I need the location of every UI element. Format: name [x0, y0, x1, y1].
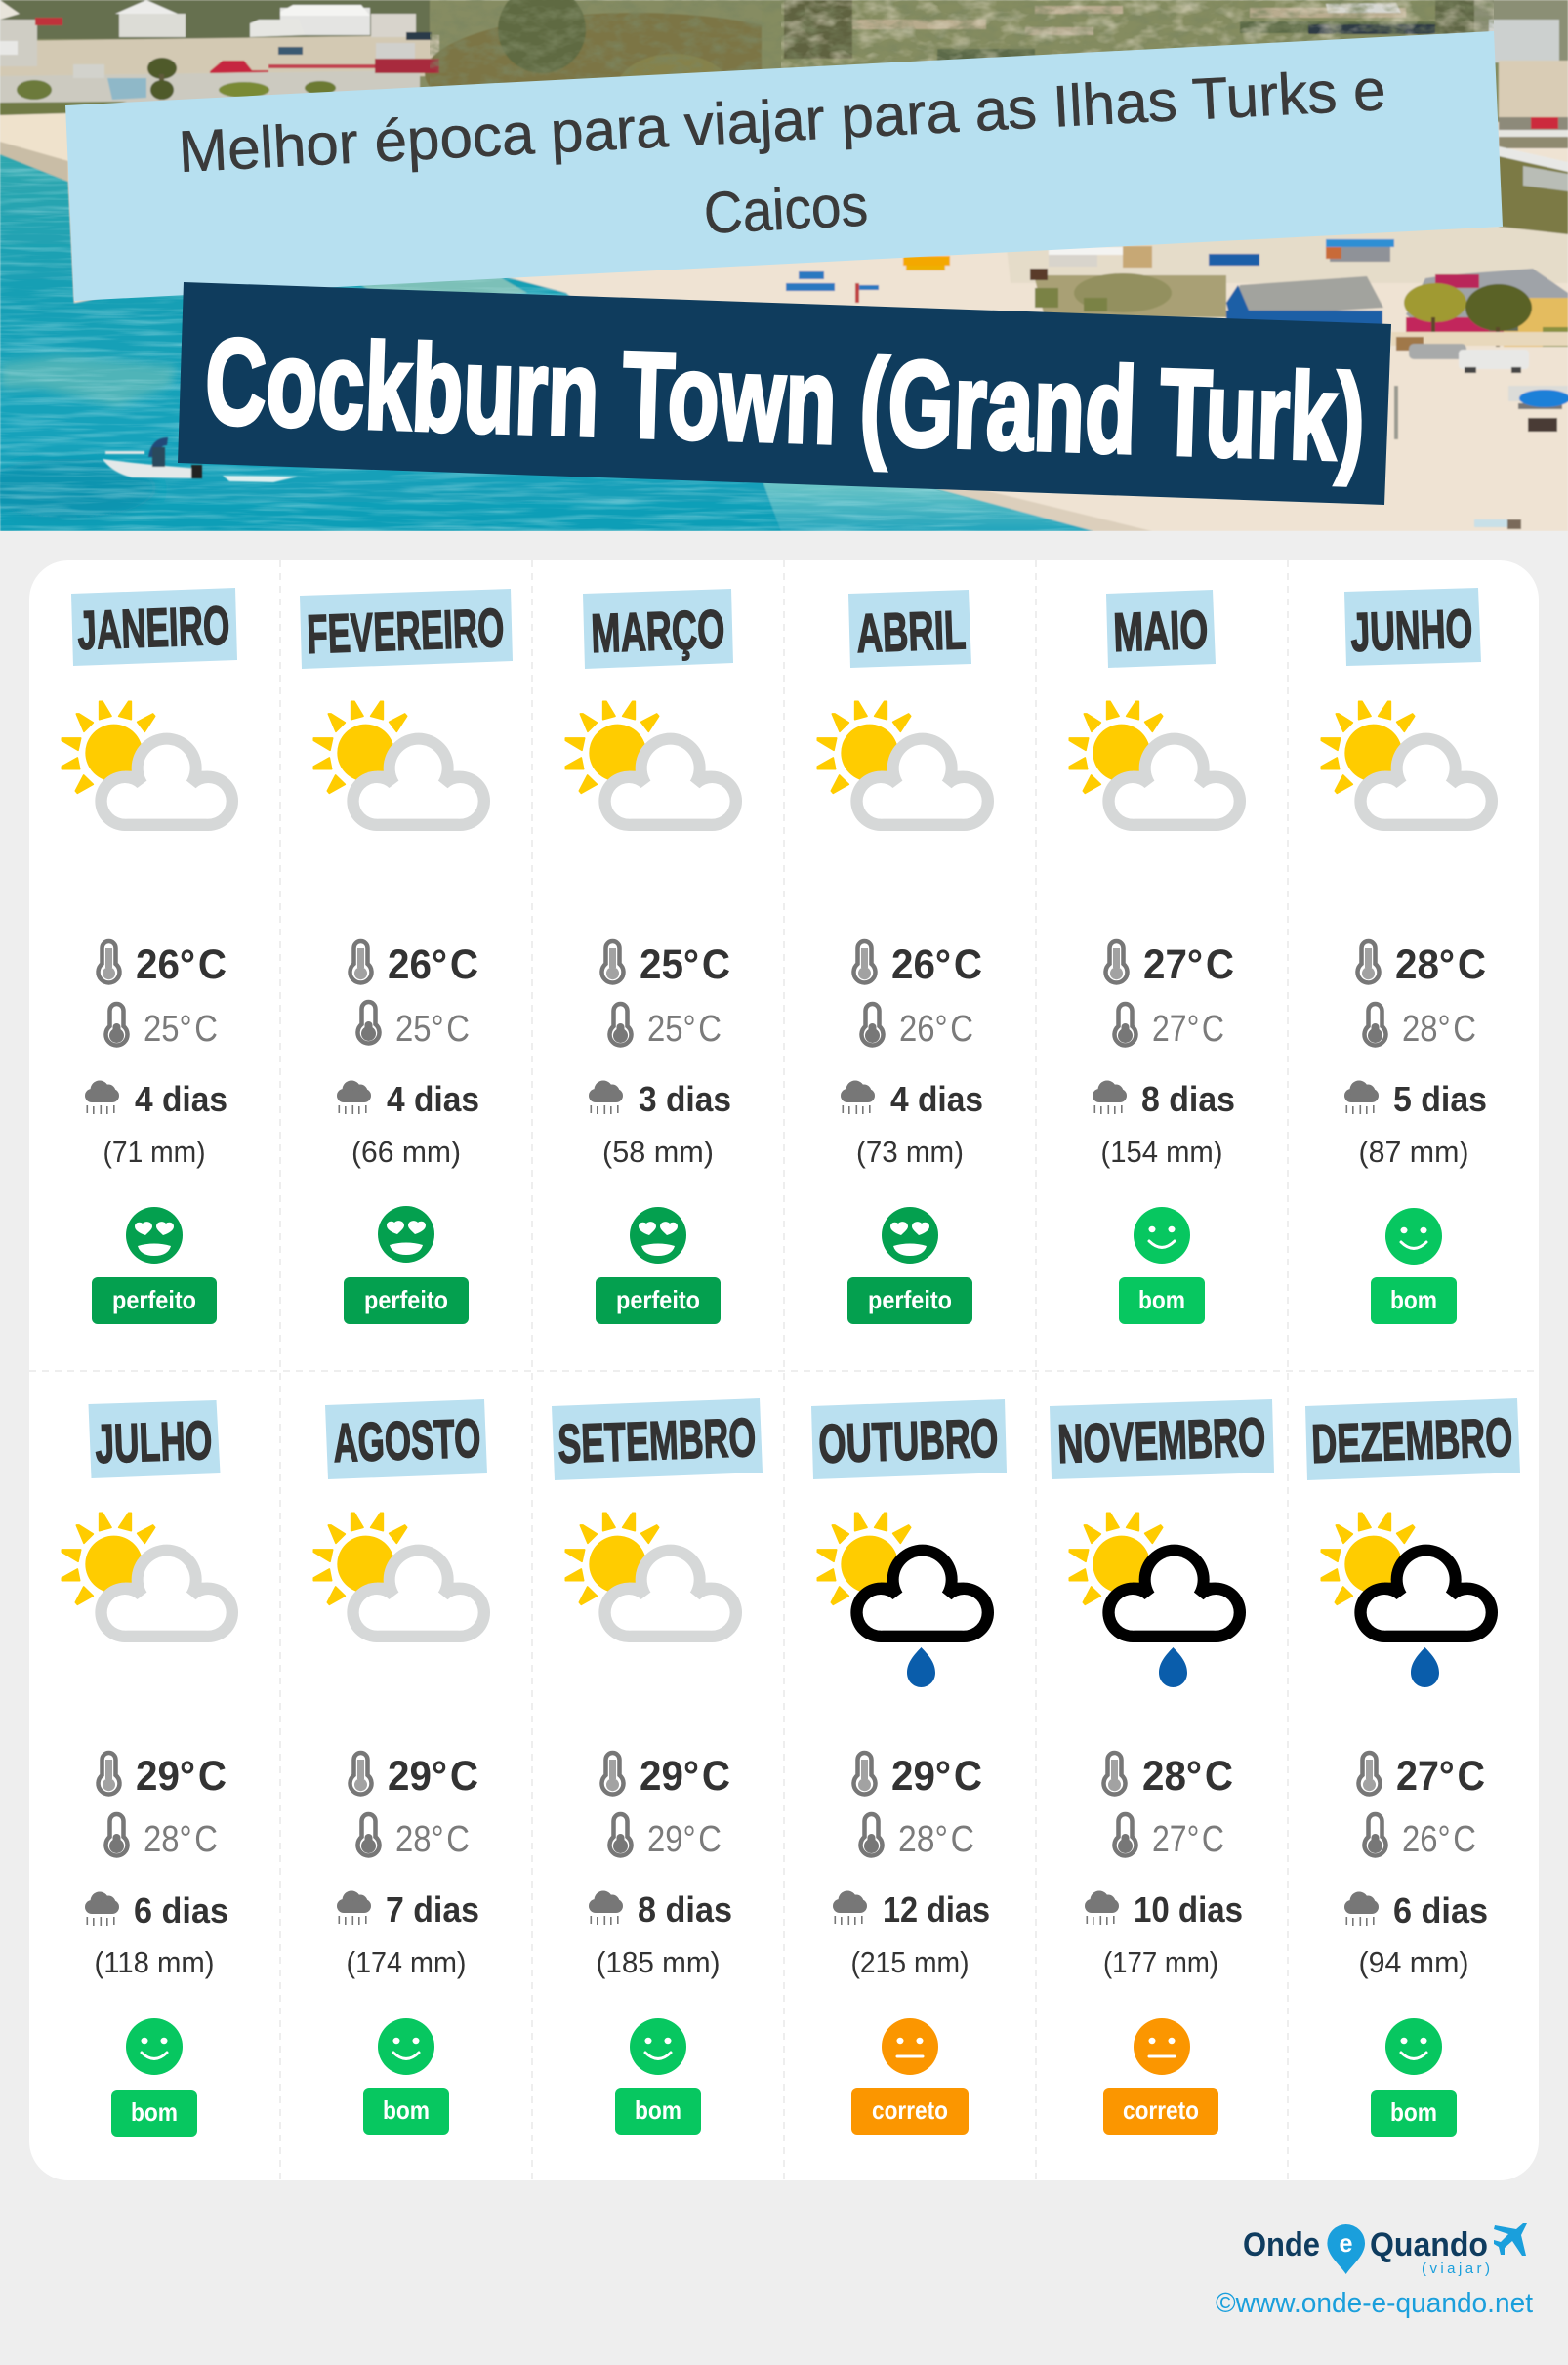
rating badge: perfeito — [112, 1285, 196, 1314]
max temperature — [1103, 1753, 1233, 1800]
rain days: 4 dias — [890, 1079, 983, 1119]
max temperature: 25°C — [640, 941, 730, 988]
rainfall: (174 mm) — [346, 1945, 467, 1979]
month: março — [565, 589, 742, 1324]
rainfall: (73 mm) — [856, 1135, 964, 1169]
max temperature — [853, 941, 982, 988]
weather icon — [62, 1513, 238, 1642]
rating badge — [847, 1277, 972, 1324]
min temperature: 27°C — [1152, 1819, 1224, 1860]
max temperature: 26°C — [388, 941, 478, 988]
min temperature — [609, 1004, 722, 1050]
rating badge — [1371, 1277, 1457, 1324]
rain days: 5 dias — [1393, 1079, 1487, 1119]
max temperature: 29°C — [136, 1753, 227, 1800]
website credit: ©www.onde-e-quando.net — [1216, 2288, 1533, 2319]
month: setembro — [552, 1398, 763, 2135]
rain days — [589, 1079, 731, 1119]
month label — [811, 1399, 1007, 1479]
rating badge: perfeito — [616, 1285, 700, 1314]
month: novembro — [1050, 1399, 1274, 2135]
rainfall: (94 mm) — [1359, 1945, 1468, 1979]
min temperature — [1115, 1004, 1224, 1050]
month label — [71, 588, 237, 666]
month label: JULHO — [94, 1409, 213, 1474]
month label — [583, 589, 733, 669]
rating face — [1134, 2018, 1190, 2075]
rainfall: (58 mm) — [602, 1135, 714, 1169]
rating badge — [1103, 2088, 1218, 2135]
month label: MAIO — [1112, 599, 1209, 663]
rain days — [833, 1889, 990, 1929]
month label — [1344, 588, 1481, 666]
month label — [848, 590, 971, 668]
logo: Onde e Quando (viajar): Onde — [1243, 2226, 1320, 2263]
rating face — [126, 1207, 183, 1264]
rainfall: (185 mm) — [596, 1945, 721, 1979]
max temperature — [99, 941, 227, 988]
rating badge: bom — [1390, 1285, 1437, 1314]
min temperature: 25°C — [144, 1009, 218, 1050]
top banner: subtitle: Melhor época para viajar para as Ilhas Turks e — [177, 57, 1387, 185]
weather icon — [565, 1513, 742, 1642]
rain days — [1344, 1890, 1488, 1930]
weather icon — [817, 1513, 994, 1687]
top banner: subtitle — [65, 31, 1503, 301]
hero photo: beach and sea — [0, 0, 1568, 531]
rain days — [337, 1079, 479, 1119]
rating badge: perfeito — [868, 1285, 952, 1314]
rain days — [1093, 1079, 1235, 1119]
rating face — [1385, 1208, 1442, 1265]
max temperature — [350, 941, 478, 988]
rainfall: (215 mm) — [851, 1945, 969, 1979]
rain days: 7 dias — [386, 1889, 479, 1929]
min temperature: 25°C — [395, 1009, 470, 1050]
month label — [552, 1398, 763, 1480]
rain days: 3 dias — [639, 1079, 731, 1119]
month: outubro — [811, 1399, 1007, 2135]
month label — [88, 1400, 221, 1478]
max temperature — [1359, 1753, 1485, 1800]
rain days — [589, 1889, 732, 1929]
icon: airplane — [1494, 2223, 1527, 2256]
rain days — [85, 1079, 227, 1119]
rating badge: bom — [1138, 1285, 1185, 1314]
max temperature: 26°C — [136, 941, 227, 988]
icon: map pin — [1327, 2224, 1365, 2274]
rain days — [337, 1889, 479, 1929]
rating badge — [92, 1277, 217, 1324]
max temperature: 27°C — [1396, 1753, 1485, 1800]
min temperature — [861, 1814, 974, 1860]
rain days: 8 dias — [638, 1889, 732, 1929]
max temperature — [601, 941, 730, 988]
month label — [1050, 1399, 1274, 1479]
rainfall: (118 mm) — [94, 1945, 215, 1979]
rain days: 4 dias — [387, 1079, 479, 1119]
month label — [1106, 590, 1216, 668]
rain days — [1344, 1079, 1487, 1119]
weather icon — [62, 701, 238, 831]
rating badge — [851, 2088, 969, 2135]
min temperature: 27°C — [1152, 1009, 1224, 1050]
rain days: 10 dias — [1134, 1889, 1243, 1929]
rainfall: (66 mm) — [351, 1135, 461, 1169]
month label: MARÇO — [590, 598, 725, 664]
min temperature: 28°C — [395, 1819, 470, 1860]
max temperature — [1105, 941, 1234, 988]
max temperature — [853, 1753, 982, 1800]
max temperature: 27°C — [1143, 941, 1234, 988]
month: dezembro — [1305, 1398, 1520, 2137]
min temperature — [105, 1004, 218, 1050]
rating face — [126, 2018, 183, 2075]
month: maio — [1069, 590, 1246, 1324]
weather icon — [565, 701, 742, 831]
month label: AGOSTO — [332, 1407, 481, 1473]
logo: Onde e Quando (viajar) — [1243, 2223, 1527, 2277]
rating badge — [344, 1277, 469, 1324]
rain days — [85, 1890, 228, 1930]
month label — [300, 589, 513, 669]
rainfall: (154 mm) — [1101, 1135, 1222, 1169]
rating badge: bom — [1390, 2097, 1437, 2127]
rating face — [378, 2018, 434, 2075]
min temperature — [357, 1002, 470, 1050]
month label: JANEIRO — [76, 595, 230, 661]
rating badge — [615, 2088, 701, 2135]
month label: ABRIL — [855, 599, 967, 664]
min temperature — [357, 1814, 470, 1860]
rating badge: bom — [635, 2095, 681, 2125]
rainfall: (87 mm) — [1359, 1135, 1468, 1169]
rating face — [378, 1206, 434, 1263]
rating badge — [1371, 2090, 1457, 2137]
rating badge — [1119, 1277, 1205, 1324]
weather icon — [1069, 701, 1246, 831]
min temperature: 28°C — [1402, 1009, 1476, 1050]
month label: SETEMBRO — [557, 1406, 757, 1474]
month label: JUNHO — [1349, 598, 1473, 663]
rating badge: correto — [872, 2095, 948, 2125]
weather icon — [817, 701, 994, 831]
rating badge — [111, 2090, 197, 2137]
rainfall: (177 mm) — [1103, 1945, 1218, 1979]
min temperature: 29°C — [647, 1819, 722, 1860]
max temperature: 26°C — [891, 941, 982, 988]
rain days: 8 dias — [1141, 1079, 1235, 1119]
rain days — [1085, 1889, 1243, 1929]
weather icon — [313, 1513, 490, 1642]
logo: Onde e Quando (viajar): (viajar) — [1422, 2261, 1490, 2277]
month: fevereiro — [300, 589, 513, 1324]
min temperature — [1365, 1814, 1476, 1860]
min temperature: 26°C — [899, 1009, 973, 1050]
min temperature — [1365, 1004, 1476, 1050]
max temperature: 29°C — [891, 1753, 982, 1800]
max temperature: 28°C — [1395, 941, 1486, 988]
rating badge: perfeito — [364, 1285, 448, 1314]
max temperature: 29°C — [388, 1753, 478, 1800]
rating badge — [363, 2088, 449, 2135]
rating badge: correto — [1123, 2095, 1199, 2125]
rain days — [841, 1079, 983, 1119]
min temperature — [861, 1004, 973, 1050]
rain days: 6 dias — [134, 1890, 228, 1930]
rainfall: (71 mm) — [103, 1135, 205, 1169]
month label: OUTUBRO — [817, 1407, 999, 1474]
weather icon — [1321, 1513, 1498, 1687]
panel: monthly climate table — [29, 560, 1539, 2180]
max temperature — [99, 1753, 227, 1800]
rating face — [1385, 2018, 1442, 2075]
month: agosto — [313, 1399, 490, 2135]
rating face — [882, 1207, 938, 1264]
month label: FEVEREIRO — [306, 597, 505, 665]
rating badge: bom — [383, 2095, 430, 2125]
min temperature — [1115, 1814, 1224, 1860]
rating badge: bom — [131, 2097, 178, 2127]
month: abril — [817, 590, 994, 1324]
max temperature: 28°C — [1142, 1753, 1233, 1800]
rating face — [630, 2018, 686, 2075]
min temperature: 28°C — [144, 1819, 218, 1860]
max temperature — [350, 1753, 478, 1800]
month: janeiro — [62, 588, 238, 1324]
min temperature: 26°C — [1402, 1819, 1476, 1860]
rain days: 12 dias — [883, 1889, 990, 1929]
min temperature — [105, 1814, 218, 1860]
rating face — [882, 2018, 938, 2075]
min temperature — [609, 1814, 722, 1860]
min temperature: 28°C — [898, 1819, 974, 1860]
icon: map pin: e — [1340, 2228, 1353, 2258]
rating face — [630, 1207, 686, 1264]
rain days: 6 dias — [1393, 1890, 1488, 1930]
month label: NOVEMBRO — [1056, 1406, 1266, 1474]
max temperature — [601, 1753, 730, 1800]
month: julho — [62, 1400, 238, 2137]
min temperature: 25°C — [647, 1009, 722, 1050]
rain days: 4 dias — [135, 1079, 227, 1119]
weather icon — [1069, 1513, 1246, 1687]
rating face — [1134, 1207, 1190, 1264]
weather icon — [1321, 701, 1498, 831]
top banner: subtitle: Caicos — [702, 172, 869, 246]
rating badge — [596, 1277, 721, 1324]
month: junho — [1321, 588, 1498, 1324]
month label — [325, 1399, 487, 1479]
weather icon — [313, 701, 490, 831]
logo: Onde e Quando (viajar): Quando — [1370, 2226, 1488, 2263]
max temperature: 29°C — [640, 1753, 730, 1800]
max temperature — [1357, 941, 1486, 988]
